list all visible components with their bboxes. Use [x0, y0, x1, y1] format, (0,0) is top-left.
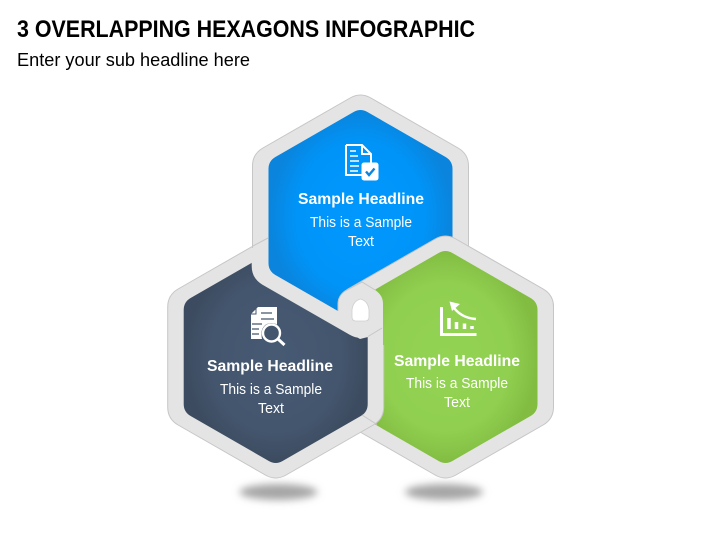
icon: declining bar chart — [442, 302, 476, 334]
central joint — [338, 282, 383, 346]
title: 3 OVERLAPPING HEXAGONS INFOGRAPHIC — [17, 16, 475, 43]
text: top hexagon: Sample Headline — [298, 191, 424, 208]
hexagon base: green right — [338, 236, 554, 478]
subtitle: Enter your sub headline here — [17, 50, 250, 70]
shadow: right hexagon — [405, 484, 483, 500]
text: left hexagon: Text — [258, 401, 284, 417]
text: top hexagon: Text — [348, 234, 374, 250]
hexagon overlap: green over blue — [338, 236, 554, 345]
text: right hexagon: This is a Sample — [406, 376, 508, 392]
text: right hexagon — [394, 353, 520, 411]
hexagon: blue top — [252, 95, 468, 337]
shadow: left hexagon — [240, 484, 318, 500]
icon: document with magnifier — [250, 307, 284, 345]
text: left hexagon: This is a Sample — [220, 382, 322, 398]
text: top hexagon — [298, 191, 424, 250]
text: right hexagon: Text — [444, 395, 470, 411]
text: top hexagon: This is a Sample — [310, 215, 412, 231]
text: left hexagon: Sample Headline — [207, 358, 333, 375]
hexagon: dark left — [168, 236, 384, 478]
text: right hexagon: Sample Headline — [394, 353, 520, 370]
joint hole — [352, 299, 369, 321]
text: left hexagon — [207, 358, 333, 417]
icon: document with check — [346, 145, 378, 180]
